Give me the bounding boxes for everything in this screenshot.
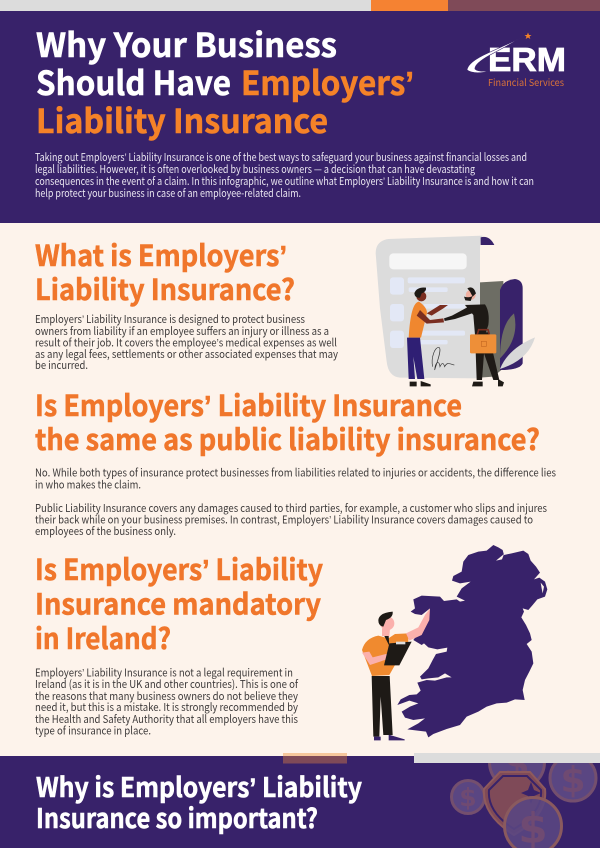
paragraphs: their back while on your business premises. In contrast, Employers’ Liability Insurance covers damages caused to <box>35 512 533 528</box>
title: Why Your Business <box>36 19 337 67</box>
illustration: man pointing at map of Ireland <box>362 545 547 740</box>
section: same as public liability <box>35 383 556 539</box>
footer heading <box>36 766 362 836</box>
coin bottom <box>504 798 562 848</box>
title <box>36 19 414 143</box>
header panel <box>0 11 600 223</box>
footer decoration: coins and shield: $ <box>560 760 586 801</box>
header intro text: legal liabilities. However, it is often overlooked by business owners — a decision that can have devastating <box>35 161 476 177</box>
clipboard <box>384 642 412 665</box>
paragraph: be incurred. <box>35 357 88 373</box>
coin top <box>488 763 546 781</box>
heading: Is Employers’ Liability Insurance <box>35 383 462 425</box>
man <box>362 633 408 676</box>
footer heading: Insurance so important? <box>36 797 318 836</box>
footer decoration: coins and shield: $ <box>504 744 530 785</box>
top colour bar <box>0 0 600 11</box>
paragraph: as any legal fees, settlements or other associated expenses that may <box>35 346 338 362</box>
heading: Liability Insurance? <box>35 267 295 309</box>
briefcase <box>470 334 496 353</box>
folder <box>480 281 503 378</box>
heading: Is Employers’ Liability <box>35 547 323 589</box>
heading: What is Employers’ <box>35 233 287 275</box>
paragraph: Employers’ Liability Insurance is not a legal requirement in <box>35 664 293 680</box>
logo: ERM Financial Services <box>467 32 566 89</box>
paragraph <box>35 311 338 373</box>
person left <box>409 302 427 338</box>
shield <box>484 772 545 835</box>
heading <box>35 383 540 459</box>
title: Liability Insurance <box>36 95 328 143</box>
person right <box>465 304 489 335</box>
logo: ERM Financial Services: Financial Services <box>488 75 564 89</box>
paragraph: need it, but this is a mistake. It is strongly recommended by <box>35 699 298 715</box>
paragraphs: in who makes the claim. <box>35 476 141 492</box>
title: Should Have <box>36 57 231 105</box>
paragraphs: employees of the business only. <box>35 523 176 539</box>
footer decoration: coins and shield: $ <box>459 783 477 812</box>
paragraph: result of their job. It covers the employee’s medical expenses as well <box>35 334 337 350</box>
paragraph: the Health and Safety Authority that all employers have this <box>35 711 298 727</box>
header intro text: consequences in the event of a claim. In this infographic, we outline what Employers’ Liability Insurance is and how it can <box>35 173 534 189</box>
header intro text: help protect your business in case of an employee-related claim. <box>35 185 301 201</box>
paragraph: Employers’ Liability Insurance is designed to protect business <box>35 311 305 327</box>
heading: in Ireland? <box>35 616 171 658</box>
section: mandatory in Ireland <box>35 545 547 740</box>
coin right <box>550 755 596 801</box>
heading <box>35 233 295 309</box>
section: what is EL insurance <box>35 233 535 386</box>
footer heading: Why is Employers’ Liability <box>36 766 362 805</box>
paragraph: the reasons that many business owners do not believe they <box>35 688 298 704</box>
paragraph: type of insurance in place. <box>35 722 151 738</box>
paragraphs <box>35 464 556 539</box>
paragraph: Ireland (as it is in the UK and other countries). This is one of <box>35 676 298 692</box>
coin small <box>452 780 484 814</box>
heading <box>35 547 323 658</box>
footer decoration: coins and shield <box>450 763 598 848</box>
contract document <box>376 236 483 378</box>
title: Employers’ <box>241 57 414 105</box>
logo: ERM Financial Services: ERM <box>488 41 566 78</box>
footer panel <box>0 753 600 848</box>
map of Ireland <box>397 545 547 737</box>
paragraph: owners from liability if an employee suffers an injury or illness as a <box>35 323 329 339</box>
illustration: handshake and contract <box>376 236 535 386</box>
header intro text <box>35 149 534 201</box>
footer bars <box>283 753 600 764</box>
paragraph <box>35 664 298 738</box>
heading: the same as public liability insurance? <box>35 417 540 459</box>
heading: Insurance mandatory <box>35 582 321 624</box>
